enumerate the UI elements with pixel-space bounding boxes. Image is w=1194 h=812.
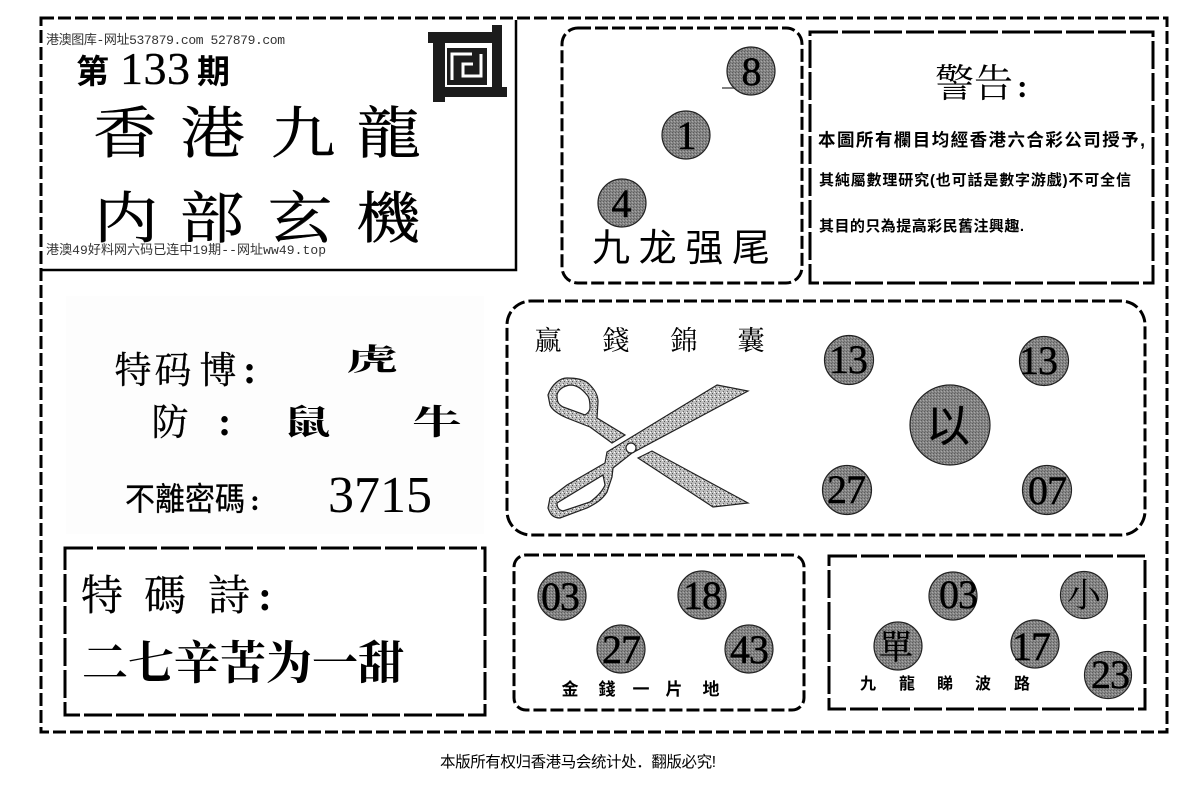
ball 4: 4 [612, 181, 632, 226]
title line 1: 九 [271, 104, 335, 166]
ball 8 [727, 47, 775, 95]
tick beside ball 8 [722, 87, 735, 89]
label: guard: : [218, 399, 231, 444]
zodiac: rat: 鼠 [283, 403, 331, 441]
icon: scissors [548, 378, 748, 518]
poem heading: 詩 [208, 574, 250, 620]
ball 17: 17 [1012, 624, 1050, 669]
scissors caption: 赢 [534, 326, 562, 356]
ball 1: 1 [676, 113, 696, 158]
ball 27: 27 [827, 467, 865, 512]
ball 03: 03 [939, 572, 977, 617]
ball 03: 03 [541, 574, 579, 619]
footer copyright: 本版所有权归香港马会统计处．翻版必究! [440, 753, 716, 771]
panel: scissors and numbers [507, 301, 1145, 535]
caption: 九 [860, 675, 876, 693]
panel: title [42, 20, 516, 270]
icon: square seal [428, 25, 507, 102]
title line 2 [94, 189, 421, 251]
panel: nine dragons tail [562, 28, 802, 283]
ball small [1060, 572, 1108, 618]
panel: gold balls [514, 555, 804, 710]
warning body: 其目的只為提高彩民舊注興趣. [819, 217, 1024, 235]
scissors pivot [626, 443, 636, 453]
title line 2: 玄 [268, 189, 332, 251]
warning body: 本圖所有欄目均經香港六合彩公司授予, [818, 130, 1145, 150]
title line 2: 機 [356, 189, 421, 251]
ball 13 left: 13 [829, 337, 867, 382]
scissors caption: 囊 [738, 326, 764, 356]
poem heading: : [258, 574, 272, 620]
title line 2: 部 [180, 189, 244, 251]
zodiac: ox: 牛 [412, 404, 462, 442]
scissors caption: 錢 [602, 326, 630, 356]
caption: 波 [975, 675, 991, 693]
ball 27: 27 [602, 627, 640, 672]
panel: warning [810, 32, 1153, 283]
ball single: 單 [879, 630, 913, 667]
ball 43: 43 [730, 627, 768, 672]
poem heading [81, 574, 272, 620]
ball 13 right: 13 [1019, 338, 1057, 383]
ball 18: 18 [683, 573, 721, 618]
warning body [818, 130, 1145, 235]
panel: nine dragons path [829, 556, 1145, 709]
title line 1 [93, 104, 421, 166]
title line 1: 龍 [357, 104, 421, 166]
caption: 一 [632, 680, 650, 699]
caption: 路 [1014, 674, 1030, 693]
ball 8: 8 [742, 49, 760, 94]
label: secret code: : [250, 484, 260, 517]
issue number: 第 [76, 53, 109, 90]
ball 23: 23 [1091, 652, 1129, 697]
caption: 龍 [899, 674, 915, 693]
caption: 地 [702, 680, 720, 699]
caption: 睇 [937, 675, 953, 693]
ball 1 [662, 111, 710, 159]
poem heading: 特 [81, 574, 123, 620]
caption: 金 [562, 679, 578, 699]
label: special code: 码 [154, 351, 192, 392]
caption: 九龙强尾 [592, 228, 770, 270]
ball 4 [598, 179, 646, 227]
panel: poem [65, 548, 485, 715]
issue number [76, 43, 230, 94]
scissors caption: 錦 [670, 326, 698, 356]
issue number: 期 [197, 53, 230, 90]
title line 1: 香 [93, 104, 158, 166]
panel: special code [66, 296, 484, 534]
ball small: 小 [1067, 578, 1102, 615]
ball center: 以 [926, 402, 970, 451]
caption: 片 [666, 680, 682, 699]
warning body: 其純屬數理研究(也可話是數字游戲)不可全信 [819, 171, 1131, 189]
label: guard [152, 399, 231, 444]
ball single [874, 622, 922, 670]
label: special code: 博 [200, 350, 236, 392]
watermark: top: 港澳图库-网址537879.com 527879.com [46, 32, 285, 48]
label: special code: 特 [114, 350, 152, 392]
poem heading: 碼 [144, 574, 186, 620]
ball 07: 07 [1028, 468, 1066, 513]
watermark: bottom: 港澳49好料网六码已连中19期--网址ww49.top [46, 242, 326, 258]
title line 1: 港 [181, 104, 245, 166]
zodiac: tiger: 虎 [346, 343, 398, 377]
code: 3715 [328, 467, 432, 524]
poem line: 二七辛苦为一甜 [82, 638, 404, 689]
title line 2: 内 [94, 189, 158, 251]
ball center [910, 385, 990, 465]
caption: 錢 [598, 679, 616, 699]
label: guard: 防 [152, 403, 188, 444]
issue number: 133 [120, 43, 190, 94]
label: secret code: 不離密碼 [125, 481, 245, 517]
warning heading: 警告: [935, 63, 1028, 106]
label: special code: : [243, 347, 256, 392]
label: special code [114, 347, 256, 392]
